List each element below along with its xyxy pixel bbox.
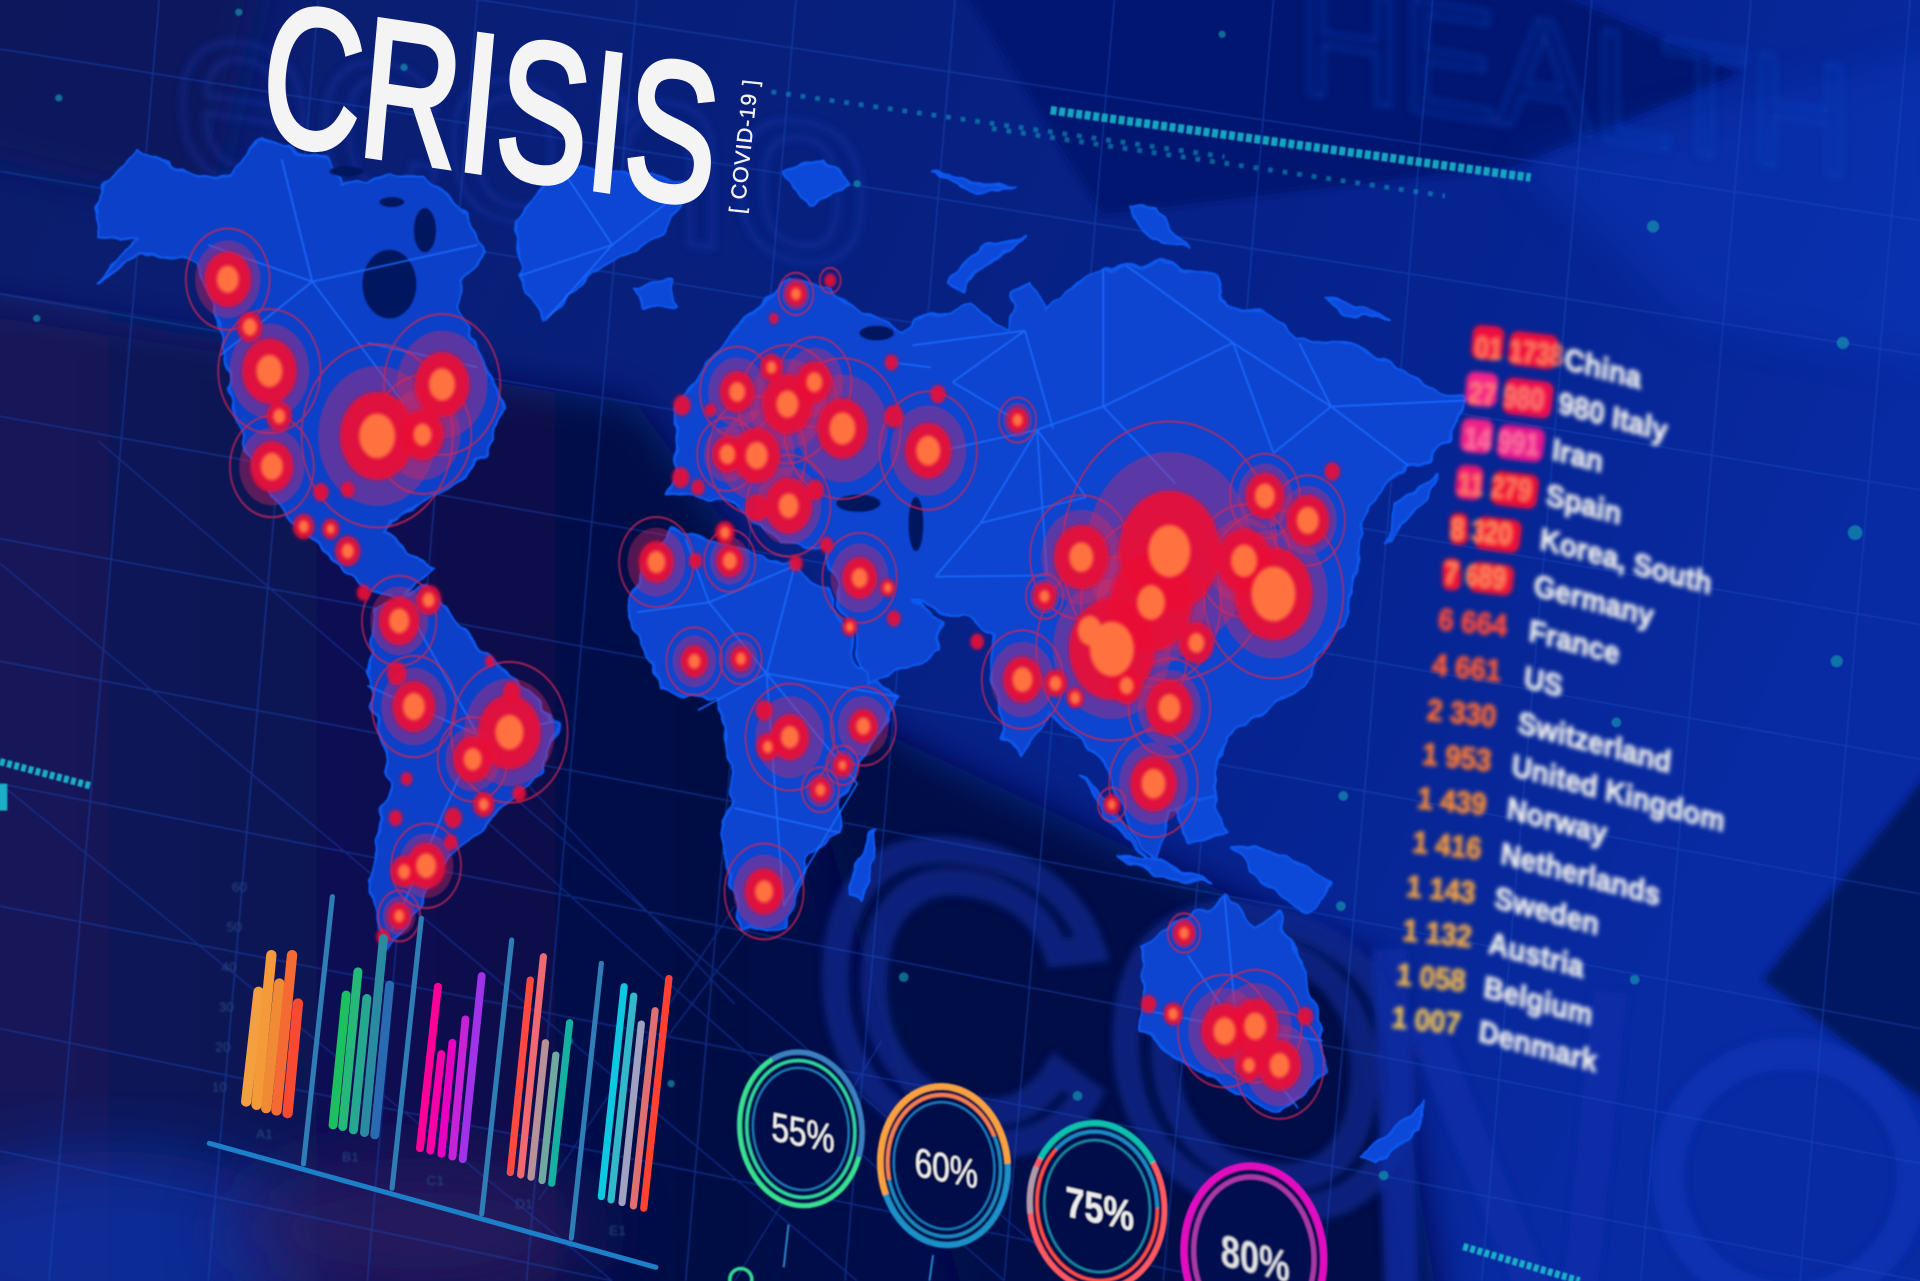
chart E1: cyan and red bars bbox=[601, 978, 669, 1208]
row: Germany: Germany bbox=[1532, 568, 1656, 634]
chart labels: A1 bbox=[256, 1127, 273, 1141]
hotspots: translucent halos bbox=[195, 240, 1337, 1106]
chart labels: D1 bbox=[515, 1197, 533, 1211]
chart A1: orange bars bbox=[246, 955, 298, 1113]
hotspots: orange cores bbox=[217, 265, 1319, 1078]
row: Netherlands: Netherlands bbox=[1499, 836, 1662, 913]
map: Australia bbox=[1141, 896, 1325, 1113]
row: Belgium: 1 058 bbox=[1395, 958, 1467, 999]
row: Belgium: Belgium bbox=[1482, 970, 1594, 1033]
gauge: 55% bbox=[732, 1046, 870, 1212]
row: China bbox=[1470, 324, 1643, 396]
gauge: 60% bbox=[872, 1080, 1016, 1252]
row: Denmark: Denmark bbox=[1477, 1014, 1599, 1080]
row: Korea, South: Korea, South bbox=[1538, 522, 1713, 602]
row: Italy bbox=[1464, 371, 1669, 449]
row: United Kingdom: 1 953 bbox=[1421, 738, 1493, 778]
map: islands bbox=[633, 159, 1439, 1163]
row: Norway bbox=[1416, 782, 1609, 852]
gauge: 55%: 55% bbox=[771, 1104, 835, 1162]
chart labels: 10 bbox=[212, 1080, 227, 1095]
chart B1: green bars bbox=[333, 938, 390, 1135]
chart labels: C1 bbox=[427, 1173, 444, 1188]
map: Eurasia bbox=[667, 263, 1466, 863]
row: Italy: 980 Italy bbox=[1557, 386, 1669, 449]
chart labels: 50 bbox=[227, 920, 242, 935]
row: Norway: 1 439 bbox=[1416, 782, 1488, 822]
row: Spain bbox=[1454, 464, 1623, 532]
row: Netherlands bbox=[1411, 826, 1662, 913]
row: France: France bbox=[1527, 614, 1621, 672]
map: seas and bays bbox=[329, 167, 923, 551]
bar charts bbox=[209, 880, 669, 1267]
map: network mesh lines bbox=[208, 159, 1466, 1108]
chart labels bbox=[212, 880, 626, 1238]
row: China: China bbox=[1563, 342, 1643, 396]
map: Greenland bbox=[514, 169, 692, 321]
row: France bbox=[1437, 603, 1621, 672]
row: United Kingdom bbox=[1421, 738, 1726, 839]
row: Switzerland: Switzerland bbox=[1516, 705, 1673, 780]
row: Sweden bbox=[1405, 870, 1601, 942]
gauge connectors bbox=[730, 1224, 933, 1281]
row: China: 01 1738 bbox=[1474, 330, 1565, 373]
row: Switzerland bbox=[1426, 694, 1673, 780]
row: United Kingdom: United Kingdom bbox=[1510, 748, 1726, 839]
row: Korea, South: 8 320 bbox=[1449, 511, 1513, 552]
row: Korea, South bbox=[1449, 511, 1713, 602]
row: Spain: Spain bbox=[1545, 478, 1623, 532]
chart C1: magenta bars bbox=[420, 976, 482, 1159]
row: Netherlands: 1 416 bbox=[1411, 826, 1483, 866]
row: US: 4 661 bbox=[1431, 649, 1502, 689]
map: North America bbox=[98, 140, 506, 600]
row: Sweden: 1 143 bbox=[1405, 870, 1477, 911]
chart axis and dividers bbox=[209, 897, 656, 1267]
map: Africa bbox=[628, 529, 898, 931]
row: US bbox=[1431, 649, 1564, 704]
hotspots: red glow bbox=[204, 251, 1340, 1091]
chart D1: coral and teal bars bbox=[510, 957, 570, 1183]
chart labels: 60 bbox=[232, 880, 247, 895]
gauge: 75%: 75% bbox=[1065, 1179, 1134, 1241]
gauge: 60%: 60% bbox=[915, 1139, 978, 1197]
row: Switzerland: 2 330 bbox=[1426, 694, 1498, 734]
country ranking list bbox=[1390, 324, 1726, 1080]
row: Austria: Austria bbox=[1487, 926, 1586, 985]
chart labels: B1 bbox=[342, 1150, 359, 1165]
chart labels: 40 bbox=[221, 960, 237, 975]
chart labels: 20 bbox=[215, 1040, 231, 1055]
row: Norway: Norway bbox=[1505, 791, 1609, 852]
row: Germany: 7 689 bbox=[1443, 555, 1507, 596]
world map landmasses bbox=[98, 140, 1466, 1163]
row: Spain: 11 279 bbox=[1457, 466, 1533, 507]
row: Sweden: Sweden bbox=[1493, 881, 1601, 942]
chart labels: 30 bbox=[219, 1000, 234, 1015]
row: Iran: 14 991 bbox=[1463, 421, 1540, 462]
row: Iran: Iran bbox=[1551, 432, 1605, 480]
row: Iran bbox=[1459, 417, 1605, 480]
row: Germany bbox=[1442, 555, 1656, 634]
hotspots: outer rings bbox=[186, 228, 1345, 1119]
chart labels: E1 bbox=[609, 1223, 626, 1238]
row: Denmark bbox=[1390, 1001, 1599, 1080]
row: Austria: 1 132 bbox=[1401, 914, 1473, 955]
gauge: 75% bbox=[1021, 1116, 1173, 1281]
row: France: 6 664 bbox=[1437, 603, 1509, 644]
gauge: 80% bbox=[1175, 1159, 1333, 1281]
row: Belgium bbox=[1395, 958, 1594, 1033]
row: Austria bbox=[1401, 914, 1586, 985]
row: US: US bbox=[1523, 660, 1564, 704]
teal dotted lines bbox=[0, 92, 1580, 1281]
row: Italy: 27 980 bbox=[1468, 375, 1545, 417]
subtitle: COVID-19: [ COVID-19 ] bbox=[725, 78, 763, 215]
row: Denmark: 1 007 bbox=[1390, 1001, 1462, 1042]
map: South America bbox=[367, 585, 561, 949]
